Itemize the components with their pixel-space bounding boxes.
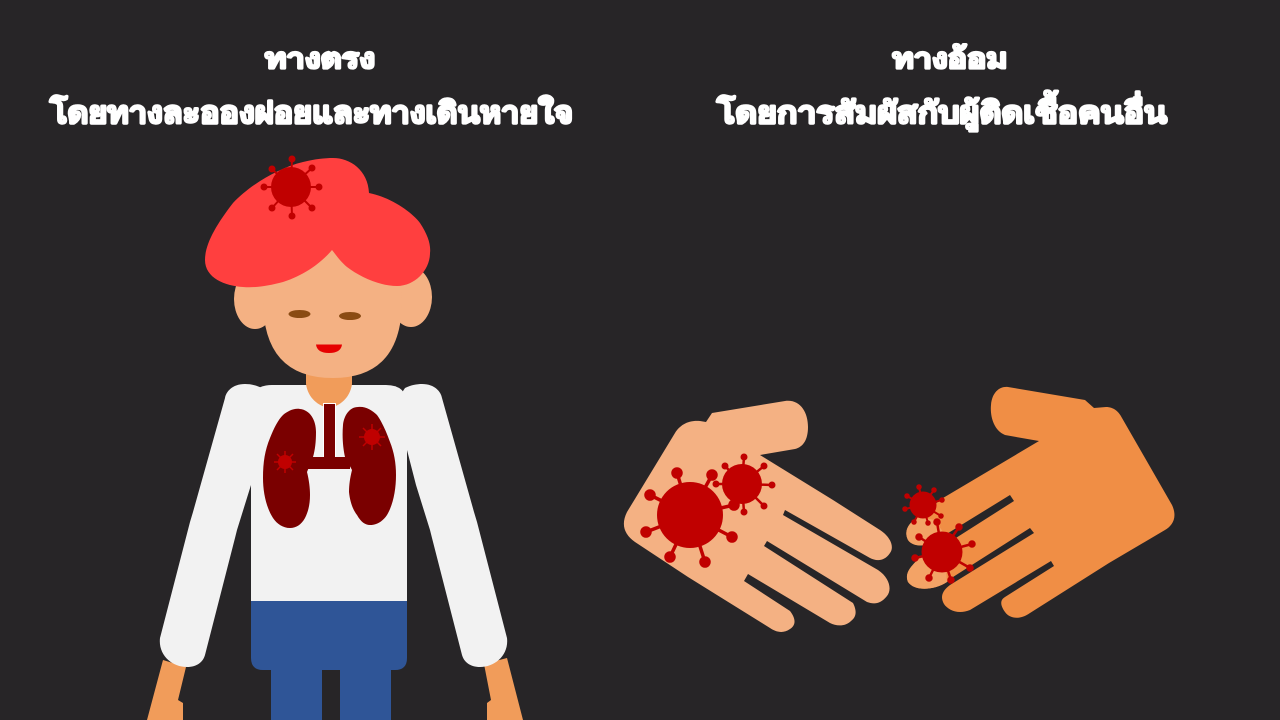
trachea [307, 404, 350, 469]
left eye [288, 310, 310, 318]
large virus on palm [646, 473, 734, 562]
heading: direct transmission: ทางตรง [265, 43, 375, 74]
left lung [263, 409, 316, 528]
small virus on palm [716, 457, 772, 512]
heading: indirect transmission: ทางอ้อม [892, 43, 1008, 74]
neck [306, 370, 352, 408]
small virus on fingers [905, 487, 942, 523]
light fingertip lower [907, 553, 947, 589]
right ear [390, 267, 432, 327]
mouth [316, 344, 342, 353]
right lung [343, 407, 396, 525]
large virus on fingers [915, 522, 972, 580]
hair [205, 158, 430, 287]
trachea top edge [324, 404, 336, 457]
heading: direct transmission [49, 43, 573, 130]
right eye [339, 312, 361, 320]
left wrist [147, 660, 186, 720]
heading: direct transmission: โดยทางละอองฝอยและทางเดินหายใจ [49, 94, 573, 130]
shirt body [251, 385, 407, 601]
left ear [234, 269, 276, 329]
person figure [147, 158, 523, 720]
left hand shape [624, 401, 892, 632]
right hand [905, 387, 1174, 618]
trousers [251, 601, 407, 720]
left sleeve [160, 384, 270, 667]
virus on head [264, 159, 319, 216]
right hand shape [906, 387, 1174, 618]
heading: indirect transmission [716, 43, 1168, 132]
virus in left lung [274, 451, 296, 473]
virus in right lung [359, 424, 385, 450]
right sleeve [397, 384, 507, 667]
lungs [263, 404, 396, 528]
face [263, 245, 402, 378]
light fingertip upper [906, 517, 945, 545]
heading: indirect transmission: โดยการสัมผัสกับผู้ติดเชื้อคนอื่น [716, 90, 1168, 132]
left hand [624, 401, 892, 632]
right wrist [484, 658, 523, 720]
